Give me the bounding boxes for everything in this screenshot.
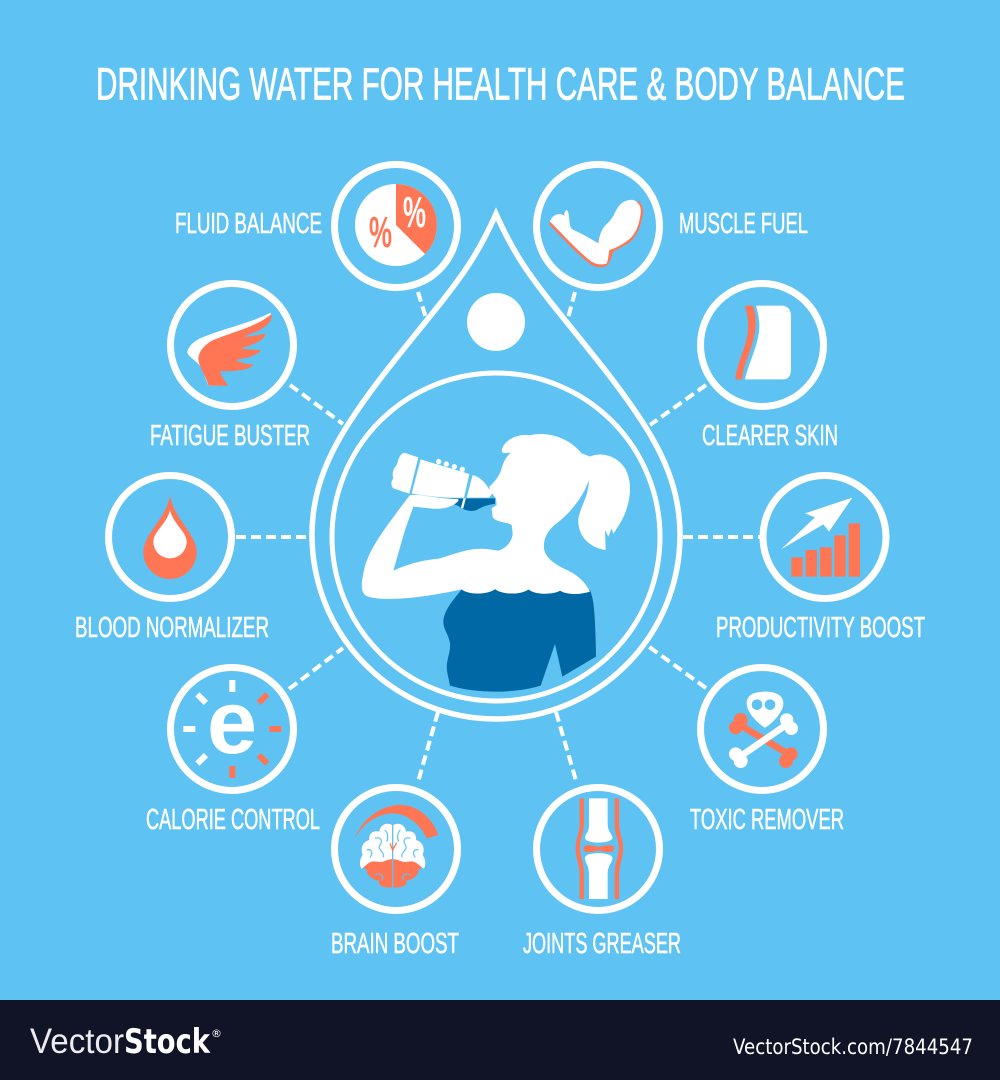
bottle divider [462, 498, 465, 508]
label: TOXIC REMOVER [690, 804, 844, 836]
ring [763, 476, 886, 598]
panel: blood normalizer [75, 476, 269, 644]
label: FATIGUE BUSTER [150, 420, 310, 452]
footer logo: Vector: Vector [30, 1022, 124, 1061]
footer bar [0, 1000, 1000, 1080]
panel: brain boost [331, 788, 459, 960]
panel: muscle fuel [536, 164, 808, 288]
label: JOINTS GREASER [523, 928, 681, 960]
label: BLOOD NORMALIZER [75, 612, 269, 644]
label: CLEARER SKIN [702, 420, 838, 452]
ring [700, 668, 824, 790]
central water drop [312, 214, 680, 719]
label: CALORIE CONTROL [146, 804, 320, 836]
ring [536, 164, 660, 288]
connector lines [236, 292, 760, 784]
ring [170, 284, 294, 406]
panel: productivity boost [716, 476, 925, 644]
ring [108, 476, 232, 598]
icon: pie chart [355, 184, 437, 266]
icon: wing [187, 313, 272, 386]
icon: brain with gauge [354, 805, 438, 888]
woman drinking from bottle [362, 434, 630, 692]
water in bottle [440, 498, 495, 511]
panel: clearer skin [700, 284, 838, 452]
icon: pie chart: % [369, 208, 392, 257]
icon: energy sun: e [207, 673, 257, 773]
body, head and ponytail [362, 434, 630, 599]
ring [700, 284, 824, 406]
icon: skin layers [735, 306, 791, 379]
tank top [443, 589, 596, 692]
ring [334, 788, 458, 910]
icon: growth chart [781, 498, 860, 577]
drop outline [312, 214, 680, 719]
icon: flexed arm [549, 200, 643, 268]
panel: fluid balance [175, 164, 458, 288]
panel: toxic remover [690, 668, 844, 836]
icon: blood drop [143, 494, 197, 579]
footer logo: Stock: Stock [124, 1022, 211, 1062]
ring [334, 164, 458, 288]
panel: calorie control [146, 668, 320, 836]
label: MUSCLE FUEL [679, 208, 808, 240]
label: BRAIN BOOST [331, 928, 459, 960]
icon: skull and bones [729, 692, 798, 768]
icon: energy sun [183, 673, 281, 778]
registered mark: ® [211, 1027, 222, 1040]
label: FLUID BALANCE [175, 208, 322, 240]
ring [536, 788, 660, 910]
inner circle [332, 373, 660, 701]
drop highlight circle [467, 293, 525, 351]
panel: joints greaser [523, 788, 681, 960]
bottle [391, 453, 493, 498]
icon: pie chart: % [403, 188, 426, 237]
icon: knee joint [576, 798, 623, 899]
ring [170, 668, 294, 790]
panel: fatigue buster [150, 284, 310, 452]
